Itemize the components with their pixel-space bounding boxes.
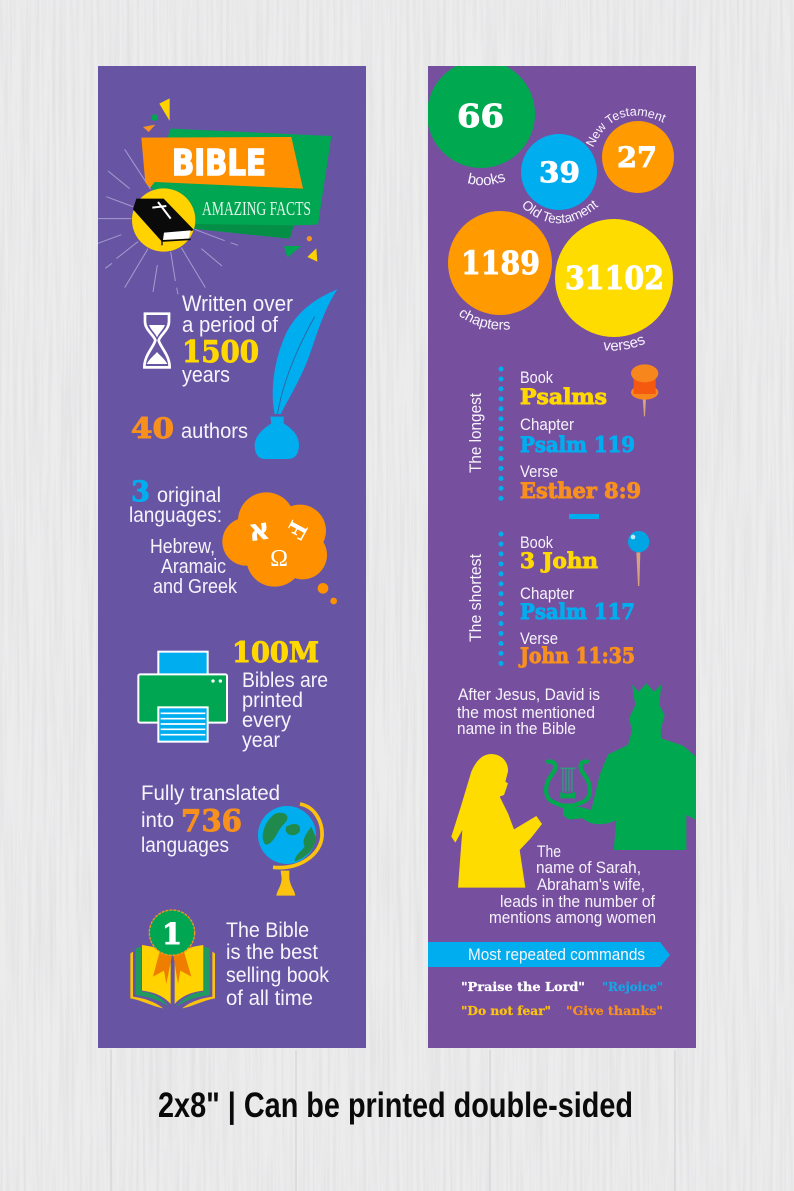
title: BIBLE: BIBLE bbox=[172, 143, 266, 184]
icon: orange push pin bbox=[631, 364, 658, 416]
text: best selling book bbox=[226, 919, 329, 1010]
caption: 2x8" | Can be printed double-sided bbox=[158, 1086, 633, 1125]
text: 100M bibles printed: 100M bbox=[232, 636, 319, 669]
bubble: 1189 chapters: 1189 bbox=[461, 244, 540, 282]
label: the shortest: The shortest bbox=[466, 554, 485, 642]
bubble: 27 new testament bbox=[586, 108, 674, 193]
text: david: the most mentioned bbox=[457, 704, 595, 722]
icon: hourglass bbox=[144, 314, 170, 367]
text: written over: Written over bbox=[182, 291, 293, 316]
bubble: 31102 verses: verses bbox=[604, 336, 645, 351]
icon: blue pin bbox=[628, 531, 649, 586]
icon: thought cloud with letters bbox=[222, 492, 337, 604]
text: fully translated: Fully translated bbox=[141, 782, 280, 805]
text: sarah: name of Sarah, bbox=[536, 859, 641, 877]
panel: right bookmark bbox=[428, 66, 696, 1048]
list: shortest: Chapter bbox=[520, 584, 574, 603]
list: shortest: Psalm 117 bbox=[520, 599, 635, 624]
text: written over: a period of bbox=[182, 312, 279, 337]
icon: quill and inkwell bbox=[255, 289, 337, 459]
text: 40 authors bbox=[131, 412, 248, 445]
list: shortest: 3 John bbox=[520, 548, 598, 573]
text: sarah: The bbox=[537, 843, 561, 861]
icon: thought cloud with letters: א bbox=[246, 512, 272, 549]
bubble: 39 old testament: Old Testament bbox=[523, 200, 598, 224]
bubble: 31102 verses: 31102 bbox=[565, 259, 664, 297]
text: 40 authors: 40 bbox=[131, 412, 174, 445]
list: longest bbox=[520, 368, 641, 503]
label: the longest: The longest bbox=[466, 393, 485, 473]
text: sarah: Abraham's wife, bbox=[537, 876, 645, 894]
title banner bbox=[98, 98, 331, 294]
text: 3 original languages: languages: bbox=[129, 504, 222, 527]
dotted line: longest bbox=[498, 369, 504, 499]
text: 100M bibles printed: every bbox=[242, 709, 291, 732]
text: sarah: leads in the number of bbox=[500, 893, 655, 911]
list: shortest bbox=[518, 533, 635, 668]
commands list bbox=[461, 980, 663, 1018]
text: 3 original languages: original bbox=[157, 484, 221, 507]
text: written over: years bbox=[182, 362, 230, 387]
list: longest: Chapter bbox=[520, 415, 574, 434]
bubble: 39 old testament bbox=[521, 134, 598, 224]
text: best selling book: is the best bbox=[226, 941, 318, 964]
text: david: name in the Bible bbox=[457, 720, 576, 738]
list: longest: Esther 8:9 bbox=[520, 478, 641, 503]
commands list: "Give thanks" bbox=[566, 1004, 663, 1018]
text: 100M bibles printed: printed bbox=[242, 689, 303, 712]
icon: thought cloud with letters: F bbox=[280, 516, 314, 545]
icon: award book bbox=[130, 910, 215, 1008]
silhouette: sarah bbox=[451, 754, 542, 888]
text: sarah: mentions among women bbox=[489, 909, 656, 927]
list: shortest: Verse bbox=[520, 629, 558, 648]
icon: thought cloud with letters: Ω bbox=[270, 546, 288, 572]
text: 100M bibles printed bbox=[232, 636, 328, 752]
list: longest: Book bbox=[520, 368, 553, 387]
text: 3 original languages: Hebrew, bbox=[150, 536, 215, 558]
silhouette: king david with lyre bbox=[546, 683, 696, 850]
list: longest: Psalms bbox=[520, 384, 607, 409]
bubble: 31102 verses bbox=[555, 219, 673, 351]
divider dash bbox=[569, 514, 599, 519]
commands list: "Praise the Lord" bbox=[461, 980, 585, 994]
list: shortest: Book bbox=[520, 533, 553, 552]
list: shortest: John 11:35 bbox=[518, 643, 635, 668]
bubble: 66 books: 66 bbox=[457, 97, 504, 135]
commands list: "Do not fear" bbox=[461, 1004, 551, 1018]
bubble: 1189 chapters bbox=[448, 211, 552, 330]
text: fully translated: languages bbox=[141, 834, 229, 857]
text: best selling book: The Bible bbox=[226, 919, 309, 942]
arrow banner: most repeated commands bbox=[428, 942, 670, 967]
bubble: 27 new testament: New Testament bbox=[586, 108, 666, 147]
text: fully translated: 736 bbox=[181, 804, 242, 839]
text: best selling book: selling book bbox=[226, 964, 329, 987]
text: 3 original languages bbox=[129, 475, 238, 598]
bubble: 27 new testament: 27 bbox=[617, 141, 657, 174]
text: 3 original languages: and Greek bbox=[153, 576, 238, 598]
text: 3 original languages: 3 bbox=[131, 475, 150, 508]
list: longest: Verse bbox=[520, 462, 558, 481]
text: david bbox=[457, 686, 600, 738]
text: 100M bibles printed: year bbox=[242, 729, 280, 752]
panel: left bookmark bbox=[98, 66, 366, 1048]
text: sarah bbox=[489, 843, 656, 927]
subtitle: AMAZING FACTS: AMAZING FACTS bbox=[202, 198, 311, 220]
text: written over: 1500 bbox=[182, 335, 259, 370]
text: 40 authors: authors bbox=[181, 420, 248, 443]
icon: printer bbox=[138, 652, 227, 742]
number: 1 on medal: 1 bbox=[162, 917, 182, 951]
text: 3 original languages: Aramaic bbox=[161, 556, 226, 578]
list: longest: Psalm 119 bbox=[520, 432, 635, 457]
text: written over bbox=[182, 291, 293, 387]
commands list: "Rejoice" bbox=[602, 980, 663, 994]
text: 100M bibles printed: Bibles are bbox=[242, 669, 328, 692]
text: david: After Jesus, David is bbox=[458, 686, 600, 704]
text: fully translated bbox=[141, 782, 280, 857]
bubble: 1189 chapters: chapters bbox=[460, 310, 510, 330]
bubble: 66 books bbox=[428, 66, 535, 186]
icon: globe bbox=[258, 804, 322, 896]
bubble: 66 books: books bbox=[468, 172, 506, 186]
text: best selling book: of all time bbox=[226, 987, 313, 1010]
dotted line: shortest bbox=[498, 534, 504, 664]
arrow banner: most repeated commands: Most repeated commands bbox=[468, 946, 645, 964]
bubble: 39 old testament: 39 bbox=[539, 156, 580, 189]
text: fully translated: into bbox=[141, 809, 174, 832]
